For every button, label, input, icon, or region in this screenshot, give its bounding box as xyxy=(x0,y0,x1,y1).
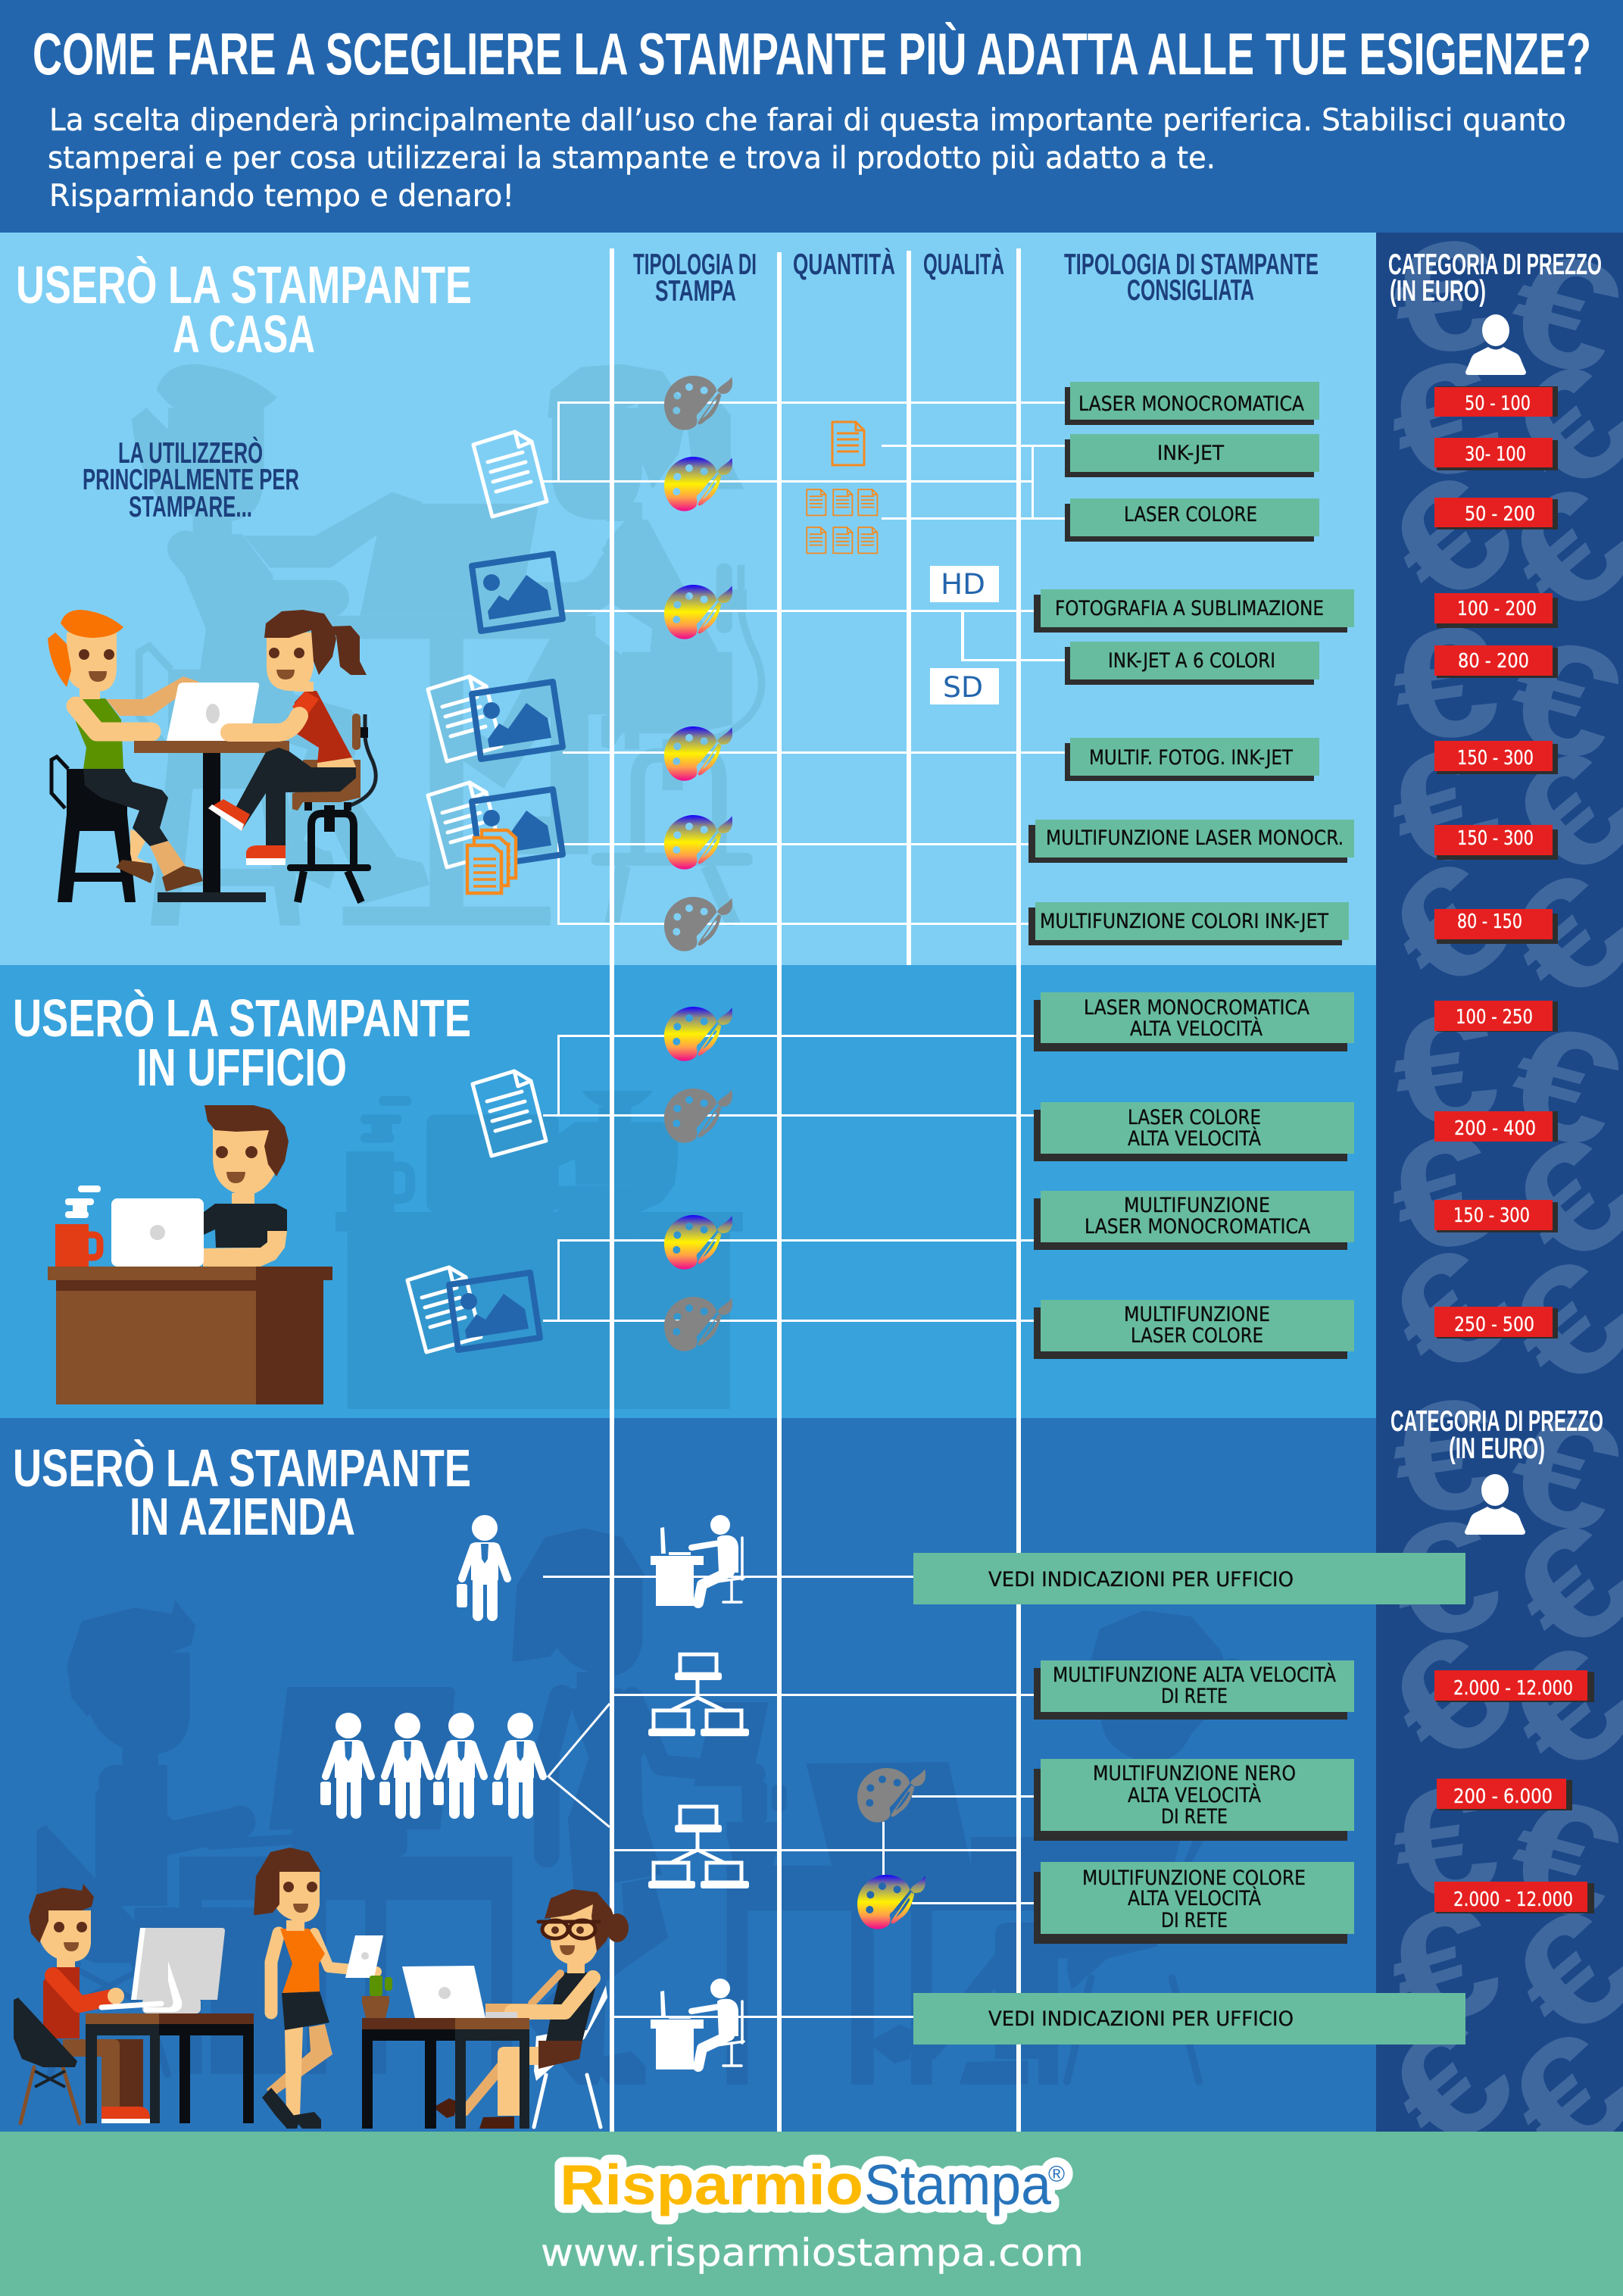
panel: price column with euro pattern: € xyxy=(1355,439,1546,639)
logo: Stampa xyxy=(864,2153,1051,2216)
icon: photo, home xyxy=(472,554,563,631)
price: 50-200: 50 - 200 xyxy=(1465,503,1535,526)
box: laser monocromatica: LASER MONOCROMATICA xyxy=(1078,392,1304,416)
price: 80-200 xyxy=(1434,645,1558,678)
icon: worker at desk 2 xyxy=(651,1979,744,2070)
price: 2.000-12.000 a xyxy=(1434,1670,1594,1702)
price: 50-100 xyxy=(1434,386,1558,417)
price: 2.000-12.000 b xyxy=(1434,1882,1594,1913)
price: 150-300 c: 150 - 300 xyxy=(1453,1204,1530,1227)
icon: color palette 7 xyxy=(857,1875,925,1929)
price: 150-300 a xyxy=(1434,741,1558,774)
box: multif. fotog. ink-jet xyxy=(1065,738,1319,781)
box: fotografia a sublimazione: FOTOGRAFIA A SUBLIMAZIONE xyxy=(1055,597,1324,620)
box: multifunzione alta velocità di rete: MULTIFUNZIONE ALTA VELOCITÀ xyxy=(1053,1663,1336,1687)
price: 2.000-12.000 a: 2.000 - 12.000 xyxy=(1453,1677,1573,1700)
icon: color palette 6 xyxy=(664,1215,732,1270)
price: 250-500: 250 - 500 xyxy=(1454,1314,1534,1336)
box: multifunzione alta velocità di rete xyxy=(1034,1660,1354,1720)
badge: HD: HD xyxy=(941,568,985,601)
column header: price category xyxy=(1388,248,1602,308)
heading: company xyxy=(13,1439,471,1546)
box: laser colore alta velocità: LASER COLORE xyxy=(1128,1106,1261,1129)
box: multifunzione nero alta velocità di rete xyxy=(1034,1759,1354,1841)
box: multifunzione alta velocità di rete: DI RETE xyxy=(1161,1685,1228,1708)
price: 150-300 b: 150 - 300 xyxy=(1457,827,1534,850)
column header: quality: QUALITÀ xyxy=(923,248,1004,281)
icon: color palette 3 xyxy=(664,726,732,781)
price: 80-150 xyxy=(1434,909,1558,944)
panel: price column with euro pattern: € xyxy=(1355,1985,1546,2184)
panel: price column with euro pattern: € xyxy=(1381,1749,1509,1935)
column header: print type: TIPOLOGIA DI xyxy=(633,248,757,281)
text: main use caption xyxy=(83,436,299,523)
heading: office xyxy=(13,989,471,1097)
column header: price category company xyxy=(1390,1405,1603,1465)
panel: price column with euro pattern: € xyxy=(1355,826,1546,1025)
price: 50-100: 50 - 100 xyxy=(1465,392,1531,415)
column header: recommended printer: TIPOLOGIA DI STAMPANTE xyxy=(1064,248,1319,281)
icon: color palette 1 xyxy=(664,457,732,511)
heading: home: USERÒ LA STAMPANTE xyxy=(16,255,472,314)
connector lines and column rules xyxy=(543,248,1065,2132)
box: laser monocromatica xyxy=(1065,382,1319,425)
price: 250-500 xyxy=(1434,1307,1558,1339)
ghost silhouette: company scene xyxy=(30,1526,1242,2087)
heading: company: IN AZIENDA xyxy=(130,1487,355,1546)
text: main use caption: PRINCIPALMENTE PER xyxy=(83,464,299,496)
price: 30-100: 30- 100 xyxy=(1465,443,1526,466)
price: 50-200 xyxy=(1434,498,1558,529)
icon: high quantity documents xyxy=(807,489,877,553)
icon: private user xyxy=(1465,314,1526,375)
box: laser monocromatica alta velocità: ALTA VELOCITÀ xyxy=(1130,1017,1263,1041)
box: multif. fotog. ink-jet: MULTIF. FOTOG. INK-JET xyxy=(1089,746,1293,770)
ghost silhouette: home scene xyxy=(129,364,772,926)
illustration: three people in an office xyxy=(14,1848,629,2129)
panel: price column with euro pattern: € xyxy=(1381,1363,1509,1549)
panel: footer xyxy=(0,2132,1623,2296)
panel: price column with euro pattern: € xyxy=(1369,322,1518,518)
intro text xyxy=(48,103,1566,214)
column header: recommended printer xyxy=(1064,248,1319,307)
box: laser colore: LASER COLORE xyxy=(1124,503,1257,526)
logo: ® xyxy=(1048,2162,1065,2187)
box: multifunzione laser colore: MULTIFUNZIONE xyxy=(1124,1303,1270,1326)
intro text: Risparmiando tempo e denaro! xyxy=(49,179,514,214)
logo xyxy=(560,2153,1065,2216)
box: multifunzione colore alta velocità di rete xyxy=(1034,1862,1354,1944)
panel: section company background xyxy=(0,1418,1623,2132)
column header: print type: STAMPA xyxy=(655,275,736,308)
panel: section home background xyxy=(0,233,1623,965)
box: ink-jet: INK-JET xyxy=(1157,442,1224,465)
box: multifunzione laser monocromatica: MULTIFUNZIONE xyxy=(1124,1194,1270,1217)
box: laser colore alta velocità xyxy=(1034,1102,1354,1161)
intro text: La scelta dipenderà principalmente dall’uso che farai di questa importante periferica. Stabilisci quanto xyxy=(49,103,1566,138)
icon: gray palette 3 xyxy=(664,1089,732,1143)
icon: gray palette 5 xyxy=(857,1768,925,1823)
icon: gray palette 2 xyxy=(664,897,732,951)
panel: price column with euro pattern xyxy=(1376,233,1623,2132)
column header: recommended printer: CONSIGLIATA xyxy=(1127,274,1254,307)
column header: print type xyxy=(633,248,757,308)
icon: gray palette 4 xyxy=(664,1297,732,1351)
price: 100-250 xyxy=(1434,1001,1558,1032)
panel: price column with euro pattern: € xyxy=(1355,1598,1546,1798)
column header: price category: (IN EURO) xyxy=(1390,275,1486,308)
price: 80-200: 80 - 200 xyxy=(1458,650,1529,673)
price: 80-150: 80 - 150 xyxy=(1457,911,1522,933)
panel: price column with euro pattern: € xyxy=(1355,1212,1546,1411)
panel: price column with euro pattern: € xyxy=(1381,204,1509,390)
box: multifunzione nero alta velocità di rete: DI RETE xyxy=(1161,1805,1228,1829)
box: multifunzione laser monocr.: MULTIFUNZIONE LASER MONOCR. xyxy=(1046,826,1344,850)
box: laser colore xyxy=(1065,498,1319,542)
box: vedi indicazioni per ufficio 2: VEDI INDICAZIONI PER UFFICIO xyxy=(988,2007,1294,2031)
panel: price column with euro pattern: € xyxy=(1381,976,1509,1163)
box: multifunzione laser monocromatica xyxy=(1034,1191,1354,1250)
box: vedi indicazioni per ufficio 1 xyxy=(913,1553,1465,1604)
box: ink-jet a 6 colori xyxy=(1065,642,1319,685)
box: ink-jet a 6 colori: INK-JET A 6 COLORI xyxy=(1108,649,1275,673)
illustration: man at a desk xyxy=(48,1105,332,1404)
badge: SD xyxy=(930,668,999,704)
icon: four employees xyxy=(320,1713,543,1819)
ghost silhouette: office scene xyxy=(336,1091,744,1409)
panel: price column with euro pattern: € xyxy=(1369,1095,1518,1291)
box: laser colore alta velocità: ALTA VELOCITÀ xyxy=(1128,1126,1261,1151)
box: multifunzione nero alta velocità di rete: MULTIFUNZIONE NERO xyxy=(1093,1762,1296,1785)
box: ink-jet xyxy=(1065,434,1319,477)
price: 150-300 c xyxy=(1434,1200,1558,1232)
logo: Stampa xyxy=(864,2153,1051,2216)
icon: document, home xyxy=(473,432,547,517)
column header: quantity: QUANTITÀ xyxy=(793,248,895,281)
intro text: stamperai e per cosa utilizzerai la stampante e trova il prodotto più adatto a te. xyxy=(48,141,1216,176)
icon: color palette 2 xyxy=(664,585,732,639)
price: 200-6.000 xyxy=(1437,1779,1572,1810)
price: 200-400 xyxy=(1434,1111,1558,1142)
icon: document, office xyxy=(473,1071,546,1156)
illustration: two people at a laptop xyxy=(48,610,376,902)
icon: company user xyxy=(1465,1474,1525,1535)
box: multifunzione nero alta velocità di rete: ALTA VELOCITÀ xyxy=(1128,1783,1261,1807)
panel: price column with euro pattern: € xyxy=(1369,1867,1518,2063)
box: laser monocromatica alta velocità xyxy=(1034,992,1354,1051)
price: 150-300 a: 150 - 300 xyxy=(1457,747,1534,770)
badge: HD xyxy=(930,566,999,602)
heading: office: USERÒ LA STAMPANTE xyxy=(13,989,471,1048)
price: 200-6.000: 200 - 6.000 xyxy=(1453,1785,1553,1808)
price: 100-250: 100 - 250 xyxy=(1456,1006,1533,1029)
heading: office: IN UFFICIO xyxy=(136,1038,347,1097)
panel: header xyxy=(0,0,1623,233)
column header: price category company: (IN EURO) xyxy=(1449,1432,1545,1465)
box: laser monocromatica alta velocità: LASER MONOCROMATICA xyxy=(1084,996,1309,1020)
price: 30-100 xyxy=(1434,438,1558,470)
icon: document and photo, office xyxy=(407,1267,540,1352)
logo: Risparmio xyxy=(560,2153,863,2216)
panel: price column with euro pattern: € xyxy=(1369,708,1518,904)
box: vedi indicazioni per ufficio 2 xyxy=(913,1993,1465,2045)
panel: price column with euro pattern: € xyxy=(1369,1481,1518,1677)
box: multifunzione colore alta velocità di rete: ALTA VELOCITÀ xyxy=(1128,1886,1261,1910)
box: multifunzione laser monocr. xyxy=(1028,820,1354,863)
logo: ® xyxy=(1048,2162,1065,2187)
panel: price column with euro pattern: € xyxy=(1381,590,1509,776)
icon: color palette 5 xyxy=(664,1007,732,1061)
price: 100-200: 100 - 200 xyxy=(1457,598,1537,620)
price: 150-300 b xyxy=(1434,825,1558,860)
box: multifunzione laser monocromatica: LASER MONOCROMATICA xyxy=(1085,1215,1310,1239)
box: multifunzione laser colore xyxy=(1034,1300,1354,1359)
text: main use caption: STAMPARE... xyxy=(129,491,252,523)
badge: SD: SD xyxy=(943,671,983,704)
heading: home xyxy=(16,255,472,364)
price: 200-400: 200 - 400 xyxy=(1454,1117,1536,1140)
box: fotografia a sublimazione xyxy=(1034,589,1354,633)
box: multifunzione colori ink-jet: MULTIFUNZIONE COLORI INK-JET xyxy=(1040,910,1328,933)
price: 100-200 xyxy=(1434,593,1558,628)
heading: home: A CASA xyxy=(173,305,315,364)
box: multifunzione colori ink-jet xyxy=(1028,902,1349,945)
icon: worker at desk 1 xyxy=(651,1515,744,1606)
panel: section office background xyxy=(0,965,1623,1418)
icon: document, photo and stack, home xyxy=(428,783,563,893)
icon: network 2 xyxy=(648,1807,749,1888)
icon: document and photo, home xyxy=(428,676,563,761)
box: multifunzione colore alta velocità di rete: MULTIFUNZIONE COLORE xyxy=(1082,1866,1306,1890)
box: multifunzione colore alta velocità di rete: DI RETE xyxy=(1161,1909,1228,1932)
icon: color palette 4 xyxy=(664,815,732,870)
icon: gray palette 1 xyxy=(664,376,732,430)
icon: single employee xyxy=(457,1515,507,1621)
icon: network 1 xyxy=(648,1654,749,1736)
box: vedi indicazioni per ufficio 1: VEDI INDICAZIONI PER UFFICIO xyxy=(988,1568,1294,1592)
box: multifunzione laser colore: LASER COLORE xyxy=(1131,1324,1263,1348)
price: 2.000-12.000 b: 2.000 - 12.000 xyxy=(1453,1888,1573,1911)
text: main use caption: LA UTILIZZERÒ xyxy=(118,436,263,470)
website url: www.risparmiostampa.com xyxy=(541,2231,1084,2275)
heading: company: USERÒ LA STAMPANTE xyxy=(13,1439,471,1498)
icon: low quantity document xyxy=(832,422,864,465)
logo: Risparmio xyxy=(560,2153,863,2216)
